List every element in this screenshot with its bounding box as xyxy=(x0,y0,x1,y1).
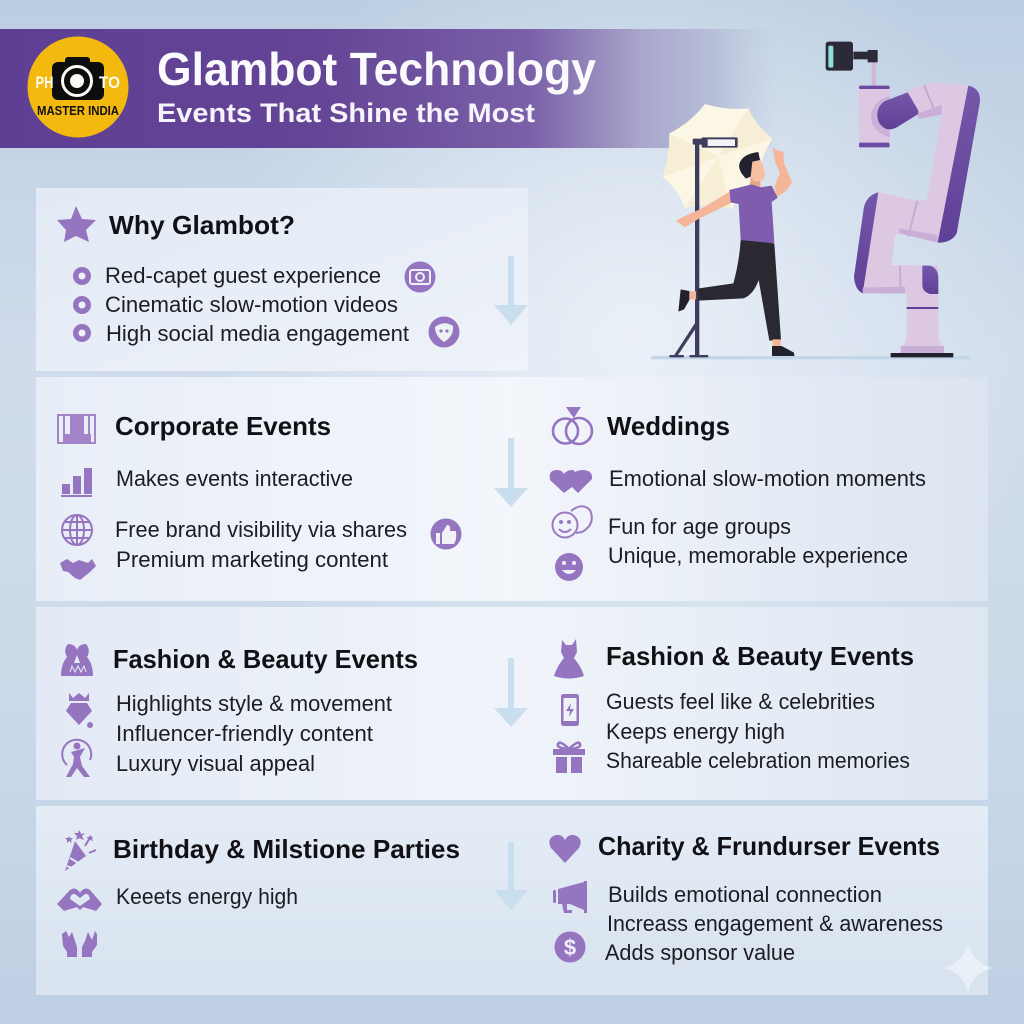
panel: Fashion and Beauty Events xyxy=(36,607,988,800)
panel: Birthday and Charity: Increass engagement & awareness xyxy=(607,911,943,936)
illustration: person posing under light and robot camera arm xyxy=(651,42,980,359)
icon: gift xyxy=(553,743,585,773)
arrow xyxy=(494,256,528,325)
camera stem xyxy=(872,62,876,87)
text: Free brand visibility via shares xyxy=(115,517,407,542)
text: Keeets energy high xyxy=(116,884,298,909)
person xyxy=(676,148,794,356)
panel: Why Glambot xyxy=(36,188,528,371)
icon: heart hands xyxy=(57,889,102,911)
umbrella light xyxy=(663,104,772,209)
icon: camera badge xyxy=(404,262,436,292)
panel: Fashion and Beauty Events: Influencer-friendly content xyxy=(116,721,373,746)
subtitle: Events That Shine the Most xyxy=(157,98,535,128)
icon: stage xyxy=(58,415,95,443)
text: Adds sponsor value xyxy=(605,940,795,965)
icon: models xyxy=(61,644,93,676)
icon: dress xyxy=(554,639,584,678)
icon: sparkle xyxy=(944,944,992,992)
text: Highlights style & movement xyxy=(116,691,392,716)
wrist cylinder xyxy=(859,86,890,147)
icon: star xyxy=(57,206,96,242)
icon: bars xyxy=(61,468,92,497)
icon: hearts xyxy=(550,470,592,493)
panel: Birthday and Charity xyxy=(36,806,992,995)
icon: thumbs up badge xyxy=(430,518,462,550)
icon: dollar badge: $ xyxy=(564,935,576,960)
icon: open hands xyxy=(62,931,97,957)
panel: Fashion and Beauty Events: Keeps energy high xyxy=(606,719,785,744)
bullets xyxy=(73,267,91,342)
icon: two faces xyxy=(552,506,592,538)
heading: Weddings: Weddings xyxy=(607,411,730,441)
icon: party popper xyxy=(65,830,96,871)
text: Premium marketing content xyxy=(116,547,388,572)
ground line xyxy=(651,356,970,359)
logo: Photo Master India xyxy=(28,36,128,138)
icon: handshake xyxy=(60,559,96,580)
icon: dollar badge xyxy=(554,932,586,962)
list xyxy=(105,263,409,346)
heading right: Charity & Frundurser Events xyxy=(598,831,940,861)
text: Guests feel like & celebrities xyxy=(606,689,875,714)
heading left: Fashion & Beauty Events xyxy=(113,644,418,674)
icon: crown diamond xyxy=(66,693,93,728)
panel: Corporate Events and Weddings xyxy=(36,377,988,601)
text: Luxury visual appeal xyxy=(116,751,315,776)
header banner xyxy=(0,29,780,148)
text: Shareable celebration memories xyxy=(606,748,910,773)
icon: rings xyxy=(553,407,592,444)
text: Makes events interactive xyxy=(116,466,353,491)
list: Cinematic slow-motion videos xyxy=(105,292,398,317)
icon: globe xyxy=(62,515,92,545)
light stand xyxy=(669,137,738,357)
logo: Photo Master India: TO xyxy=(99,73,120,92)
arrow xyxy=(494,658,528,727)
text: Unique, memorable experience xyxy=(608,543,908,568)
list: Red-capet guest experience xyxy=(105,263,381,288)
text: Emotional slow-motion moments xyxy=(609,466,926,491)
heading: Why Glambot? xyxy=(109,210,295,240)
heading: Corporate Events: Corporate Events xyxy=(115,411,331,441)
robot arm xyxy=(826,42,980,357)
heading left: Birthday & Milstione Parties xyxy=(113,834,460,864)
arrow xyxy=(494,438,528,507)
arrow xyxy=(494,842,528,910)
text: Fun for age groups xyxy=(608,514,791,539)
logo: Photo Master India: PH xyxy=(36,73,54,92)
logo: Photo Master India: MASTER INDIA xyxy=(37,103,120,118)
icon: phone xyxy=(561,694,579,726)
text: Builds emotional connection xyxy=(608,882,882,907)
icon: megaphone xyxy=(553,881,587,913)
title: Glambot Technology xyxy=(157,43,596,95)
icon: heart xyxy=(549,835,581,863)
icon: posing person xyxy=(62,740,91,777)
camera head xyxy=(826,42,878,71)
list: High social media engagement xyxy=(106,321,409,346)
icon: social badge xyxy=(428,316,460,348)
heading right: Fashion & Beauty Events xyxy=(606,641,914,671)
icon: smile xyxy=(555,553,583,581)
